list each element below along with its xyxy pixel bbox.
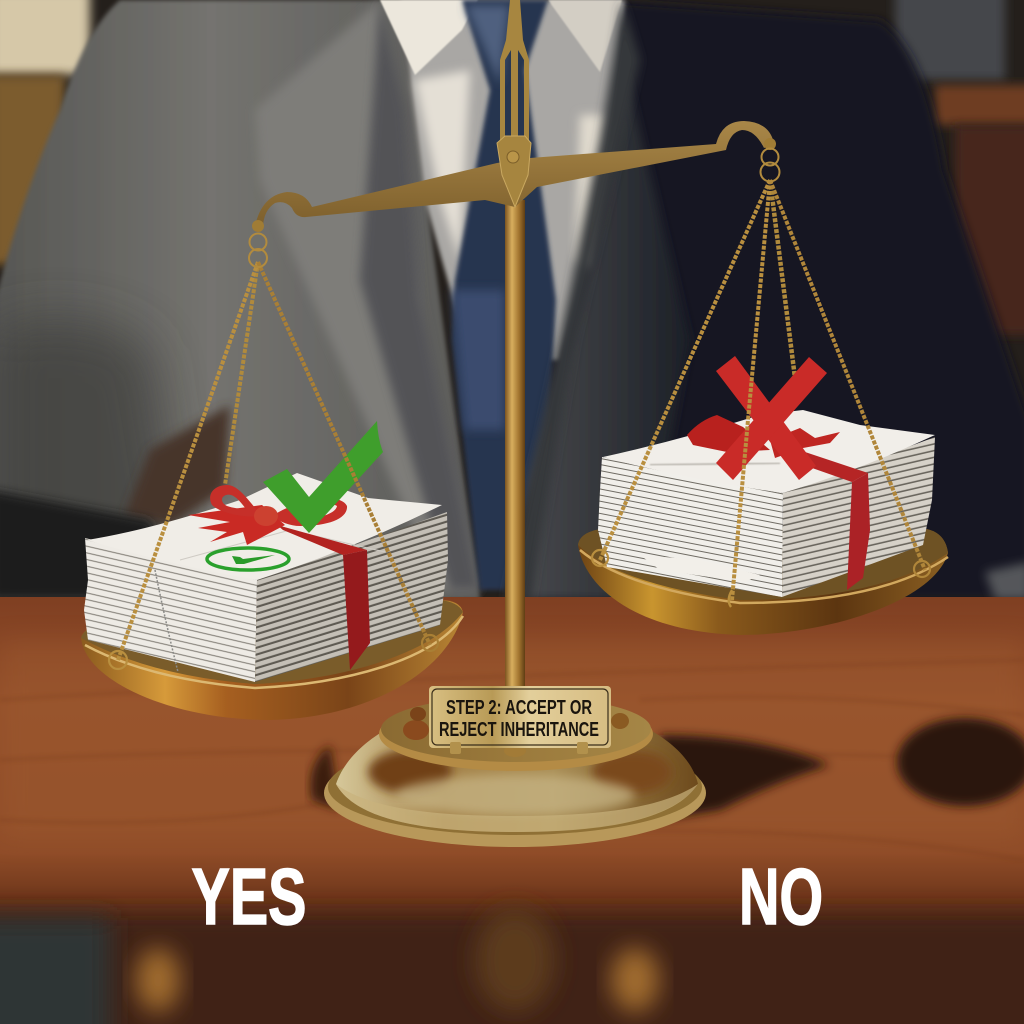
sleeve shadow <box>0 319 190 600</box>
dome <box>336 730 698 832</box>
shirt <box>400 0 625 360</box>
left document stack <box>84 473 448 682</box>
shadows on table <box>897 718 1024 806</box>
right pan chains <box>592 180 930 607</box>
right pan <box>578 528 948 635</box>
bow right tail <box>770 428 840 458</box>
base rim <box>324 739 706 847</box>
icon: large red X <box>716 356 827 480</box>
red band and bow <box>687 415 870 590</box>
red band and bow <box>188 485 370 670</box>
left pan chains <box>109 262 438 669</box>
centre pole <box>505 200 525 690</box>
studs <box>403 720 429 740</box>
plaque: STEP 2: ACCEPT OR <box>446 697 592 719</box>
right pan and stack <box>578 356 948 635</box>
icon: large green check mark <box>263 421 383 533</box>
balance beam <box>249 0 780 267</box>
left pan and stack <box>81 421 463 720</box>
right lapel <box>525 70 690 600</box>
hook rings <box>252 220 264 232</box>
left lapel <box>255 0 478 590</box>
label: NO: NO <box>739 852 823 941</box>
table: polished wood <box>0 597 1024 1024</box>
finial <box>500 0 529 140</box>
bow left loop <box>687 415 770 452</box>
pivot plate <box>497 136 531 207</box>
right document stack <box>598 410 935 597</box>
table reflection <box>0 912 1024 1024</box>
jacket: navy right side <box>520 0 1024 600</box>
person: blurred suit, shirt and tie <box>0 0 1024 600</box>
back chain right <box>770 180 795 378</box>
bow tails <box>188 505 285 545</box>
gap between arm and body <box>125 405 230 525</box>
beam <box>255 121 774 226</box>
top sheet <box>603 410 935 493</box>
left pan <box>81 600 463 720</box>
plaque <box>429 686 611 748</box>
top plate <box>379 697 653 771</box>
label: YES: YES <box>192 852 306 941</box>
tie <box>452 0 556 590</box>
bow left loop <box>210 485 262 517</box>
bow right loop <box>272 498 347 526</box>
back chain left <box>225 262 258 485</box>
collar <box>380 0 478 75</box>
icon: small green check stamp <box>207 548 289 570</box>
background: blurred office wall <box>0 0 1024 600</box>
plaque: REJECT INHERITANCE <box>439 719 599 741</box>
base of the scale <box>324 686 706 847</box>
top sheet <box>87 473 442 580</box>
jacket: grey left side <box>0 0 480 600</box>
